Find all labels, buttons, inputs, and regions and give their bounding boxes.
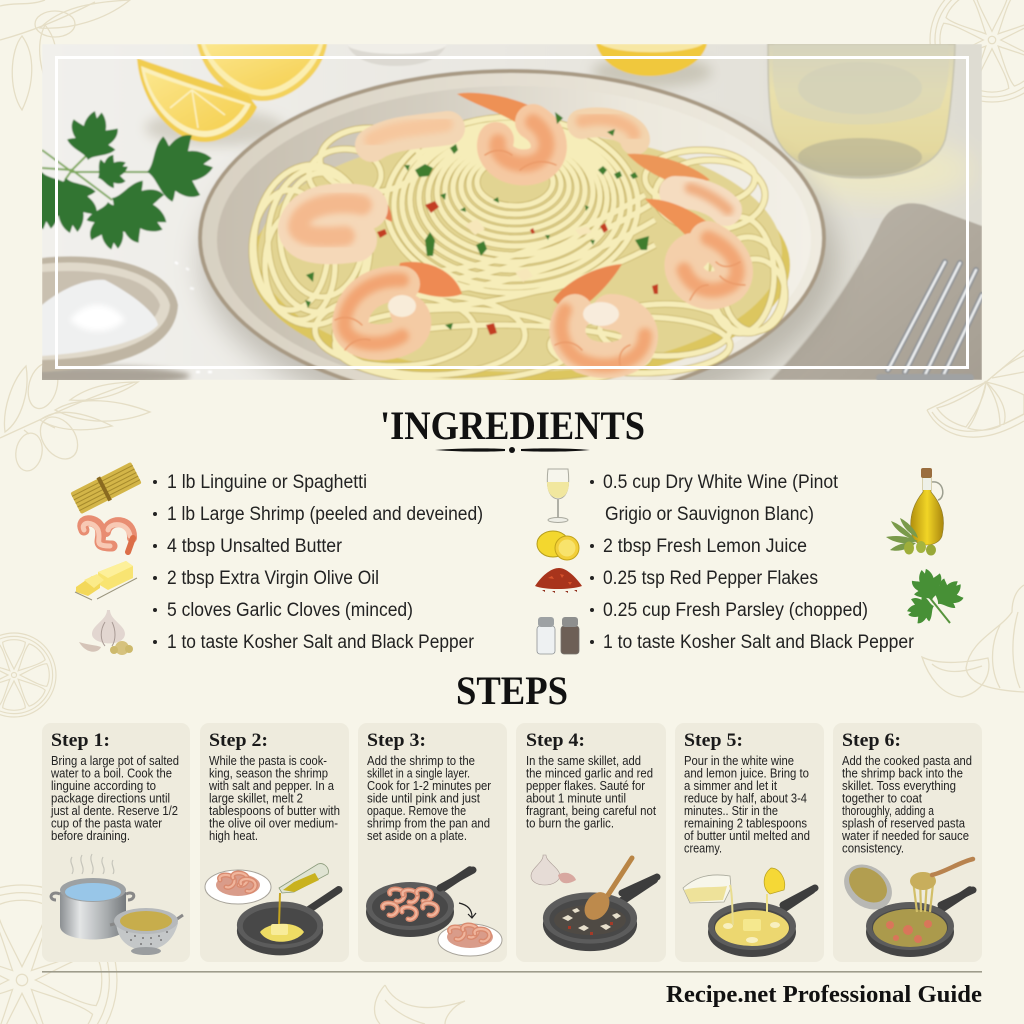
panel: step 4 <box>516 723 666 962</box>
fork <box>880 262 982 378</box>
footer credit: Recipe.net Professional Guide <box>666 982 982 1008</box>
panel: step 6 <box>833 723 982 962</box>
bullets and text: Grigio or Sauvignon Blanc) <box>605 504 814 525</box>
step 5 text: a simmer and let it <box>684 778 777 793</box>
ornament: bottom garlic clove <box>375 985 465 1024</box>
shrimp: bottom centre <box>553 264 645 366</box>
step 3 text <box>367 753 492 843</box>
step 6 text: together to coat <box>842 790 922 806</box>
step 5 text: reduce by half, about 3-4 <box>684 790 807 806</box>
step 5 text <box>684 753 810 856</box>
step 5 text: creamy. <box>684 840 722 856</box>
bullets and text: 4 tbsp Unsalted Butter <box>167 536 343 557</box>
step 1 text: linguine according to <box>51 778 156 793</box>
step 3 text: set aside on a plate. <box>367 828 467 843</box>
step 3 text: shrimp from the pan and <box>367 816 490 830</box>
icon: jug, lemon and pan with sauce <box>683 868 815 957</box>
step 3 text: skillet in a single layer. <box>367 766 470 780</box>
wine glass <box>768 44 975 200</box>
footer divider <box>42 971 982 973</box>
step 1 text: package directions until <box>51 790 170 806</box>
step 1 text: water to a boil. Cook the <box>50 766 172 780</box>
step 6 text: water if needed for sauce <box>841 828 969 843</box>
salt bowl <box>42 256 212 380</box>
ingredients list: right column <box>535 468 970 654</box>
step 5 text: Pour in the white wine <box>684 753 794 768</box>
icon: bowl, pan with pasta and fork <box>835 855 973 957</box>
icon: olive oil bottle <box>886 468 944 556</box>
step 4 text: fragrant, being careful not <box>526 803 656 818</box>
step 3 text: Cook for 1-2 minutes per <box>367 778 492 793</box>
hero photo: shrimp linguine on a plate <box>42 44 982 380</box>
step 2 text: large skillet, melt 2 <box>209 790 303 806</box>
panel: step 5 <box>675 723 824 962</box>
napkin <box>770 203 982 380</box>
shrimp: bottom left <box>335 262 462 350</box>
shrimp: right upper <box>627 154 728 210</box>
step 5 text: minutes.. Stir in the <box>684 803 778 818</box>
step 6 title: Step 6: <box>842 730 901 751</box>
step 6 text: consistency. <box>842 840 904 856</box>
step 1 title: Step 1: <box>51 730 110 751</box>
step 3 title: Step 3: <box>367 730 426 751</box>
step 2 text: tablespoons of butter with <box>209 803 340 818</box>
ornament: left lemon slice <box>0 633 56 717</box>
step 2 text: the olive oil over medium- <box>209 816 338 830</box>
lemon wedges <box>137 44 327 146</box>
step 6 text: splash of reserved pasta <box>842 816 966 830</box>
icon: pan with shrimp, arrow and plate <box>366 870 502 956</box>
shrimp: left <box>298 188 392 242</box>
parsley and pepper flecks <box>305 112 658 335</box>
panel: step 2 <box>200 723 349 962</box>
bullets and text: 0.25 cup Fresh Parsley (chopped) <box>603 600 868 621</box>
icon: butter <box>75 561 137 600</box>
icon: garlic, pan and wooden spoon <box>531 855 657 951</box>
bullets and text <box>153 472 483 653</box>
bullets and text: 0.25 tsp Red Pepper Flakes <box>603 568 818 589</box>
icon: parsley <box>904 565 970 626</box>
icon: wine glass <box>547 469 569 522</box>
shrimp: top right <box>582 119 635 140</box>
icon: red pepper flakes <box>535 568 582 593</box>
step 6 text: Add the cooked pasta and <box>842 753 972 768</box>
step 4 title: Step 4: <box>526 730 585 751</box>
step 2 title: Step 2: <box>209 730 268 751</box>
bullets and text: 1 lb Large Shrimp (peeled and deveined) <box>167 504 483 525</box>
bullets and text: 2 tbsp Fresh Lemon Juice <box>603 536 807 557</box>
step 6 text <box>841 753 972 856</box>
step 1 text: cup of the pasta water <box>51 816 163 830</box>
step 6 text: thoroughly, adding a <box>842 803 935 818</box>
panel: step 3 <box>358 723 507 962</box>
bullets and text: 5 cloves Garlic Cloves (minced) <box>167 600 413 621</box>
bullets and text <box>590 472 915 653</box>
step 1 text <box>50 753 179 843</box>
bullets and text: 1 to taste Kosher Salt and Black Pepper <box>167 632 475 653</box>
step 1 text: Bring a large pot of salted <box>51 753 179 768</box>
ingredients heading: 'INGREDIENTS <box>380 403 645 448</box>
step 2 text: While the pasta is cook- <box>209 753 327 768</box>
shrimp: right <box>645 199 745 300</box>
step 4 text: the minced garlic and red <box>526 766 653 780</box>
step 2 text <box>208 753 340 843</box>
icon: pot and colander <box>51 854 183 955</box>
shrimp: top centre <box>457 93 556 170</box>
step 4 text: to burn the garlic. <box>526 816 614 830</box>
step 5 text: remaining 2 tablespoons <box>684 816 807 830</box>
step 3 text: Add the shrimp to the <box>367 753 475 768</box>
steps heading: STEPS <box>456 668 568 713</box>
step 5 text: of butter until melted and <box>684 828 810 843</box>
icon: lemon <box>537 531 579 560</box>
ornament: top-left leaves <box>0 0 130 110</box>
icon: linguine bundle <box>70 461 142 515</box>
ornament: right garlic <box>922 585 1024 697</box>
icon: shrimp <box>83 521 133 552</box>
bullets and text: 0.5 cup Dry White Wine (Pinot <box>603 472 839 493</box>
step 6 text: the shrimp back into the <box>842 766 963 780</box>
pasta and sauce <box>250 117 790 385</box>
background lemon half <box>592 44 712 88</box>
step 6 text: skillet. Toss everything <box>842 778 956 793</box>
ingredients list: left column <box>70 461 483 655</box>
ornament: top-right lemon slice <box>930 0 1024 102</box>
step 4 text: about 1 minute until <box>526 790 626 806</box>
step 2 text: king, season the shrimp <box>209 766 328 780</box>
step 3 text: side until pink and just <box>367 790 480 806</box>
step 1 text: before draining. <box>51 828 130 843</box>
white inner frame <box>56 58 968 368</box>
step 2 text: with salt and pepper. In a <box>208 778 335 793</box>
step 2 text: high heat. <box>209 828 258 843</box>
step 1 text: just al dente. Reserve 1/2 <box>50 803 178 818</box>
step 4 text <box>526 753 656 830</box>
step 3 text: opaque. Remove the <box>367 803 466 818</box>
step 5 title: Step 5: <box>684 730 743 751</box>
icon: garlic <box>79 610 133 655</box>
bullets and text: 1 to taste Kosher Salt and Black Pepper <box>603 632 915 653</box>
shrimp: top left <box>372 124 448 145</box>
bullets and text: 2 tbsp Extra Virgin Olive Oil <box>167 568 379 589</box>
parsley sprig <box>42 110 214 250</box>
step 4 text: pepper flakes. Sauté for <box>526 778 646 793</box>
background bowl <box>349 48 444 66</box>
ornament: bottom-left lemon slice <box>0 885 117 1024</box>
plate <box>188 68 848 380</box>
table surface <box>42 44 982 380</box>
step 4 text: In the same skillet, add <box>526 753 641 768</box>
step 5 text: and lemon juice. Bring to <box>684 766 809 780</box>
icon: shrimp plate, oil bottle and pan with butter <box>205 864 339 955</box>
bullets and text: 1 lb Linguine or Spaghetti <box>167 472 367 493</box>
ornament: right lemon wedge <box>927 350 1024 437</box>
ornament: left olive branch <box>0 360 150 473</box>
panel: step 1 <box>42 723 190 962</box>
icon: salt and pepper shakers <box>537 617 579 654</box>
